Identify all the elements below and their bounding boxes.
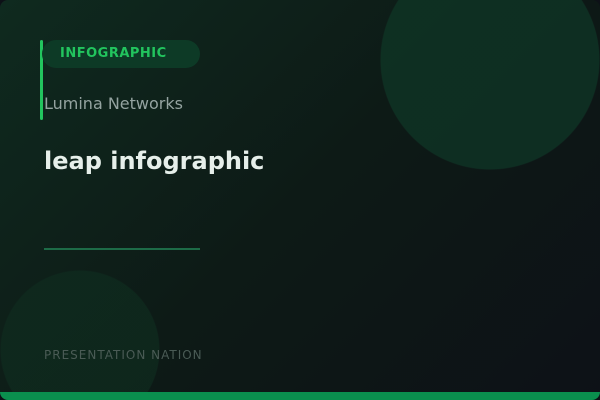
tag pill: INFOGRAPHIC: [42, 40, 200, 68]
title: leap infographic: [44, 147, 264, 175]
bottom bar: [0, 392, 600, 400]
accent bar: [40, 40, 43, 120]
company name: Lumina Networks: [44, 94, 183, 113]
footer text: PRESENTATION NATION: [44, 348, 203, 362]
decorative circle: top right: [380, 0, 600, 170]
divider line: [44, 248, 200, 250]
decorative circle: bottom left: [0, 270, 160, 392]
tag pill: INFOGRAPHIC: INFOGRAPHIC: [60, 46, 167, 61]
